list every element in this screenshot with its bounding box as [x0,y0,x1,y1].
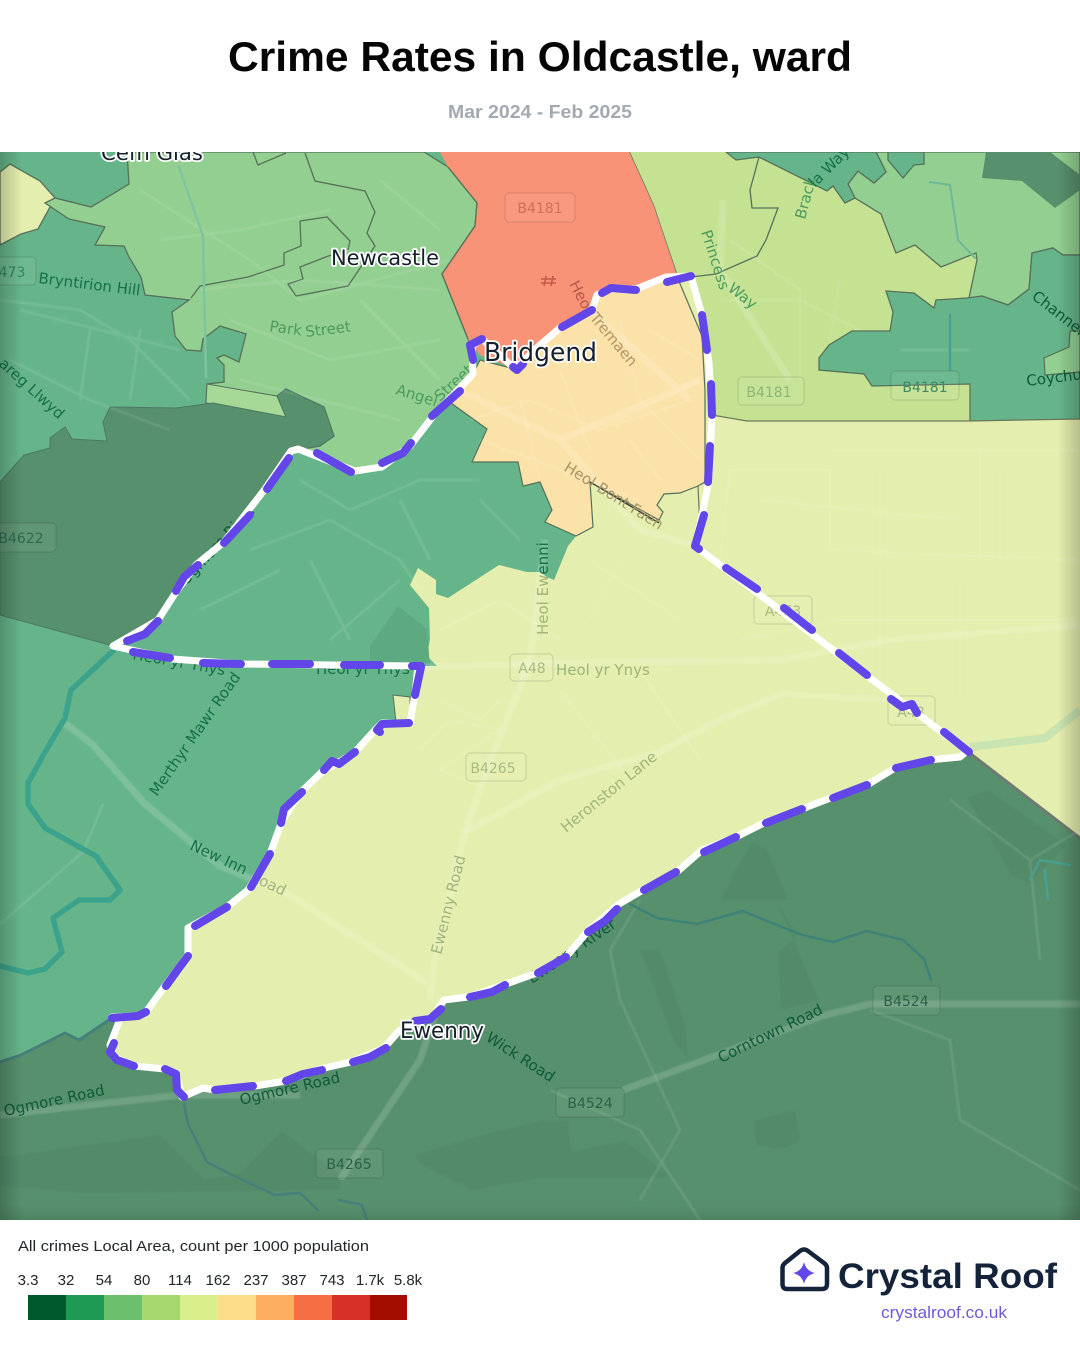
street labels: Way [725,279,761,313]
street labels: Angel [394,381,440,410]
street labels: Merthyr Mawr Road [146,669,244,799]
legend values: 162 [205,1272,231,1289]
street labels: Wick Road [483,1028,558,1086]
legend values: 5.8k [394,1272,423,1289]
darker field patches [0,790,1067,1193]
main roads [0,200,1080,1180]
legend values: 237 [243,1272,269,1289]
street labels: Heol yr Ynys [556,661,650,679]
street labels: Road [247,867,289,900]
region: central north boundaries [191,152,375,298]
region: north east light yellow green [630,152,976,420]
street labels: Princess [697,228,733,292]
region: west ward green [113,403,576,666]
legend values: 114 [168,1272,192,1289]
ward boundary purple dashes [110,276,969,1097]
road numbers: A48 [897,705,925,721]
region: south east yellow [695,415,1080,838]
legend values: 387 [281,1272,307,1289]
subtitle: date range: Mar 2024 - Feb 2025 [448,101,632,122]
street labels: Heol yr Ynys [316,660,410,678]
road: pale A48 east link [970,710,1080,747]
road numbers: B4181 [746,385,792,401]
road numbers: A473 [765,604,801,620]
street labels: Corntown Road [715,1000,825,1067]
minor roads and streets [0,180,1080,1220]
logo wordmark: Crystal Roof [838,1257,1057,1296]
street labels: Ewenny Road [427,853,469,956]
road shields [0,193,959,1178]
region: north east light green [848,152,1080,305]
street labels: Heol yr Ynys [131,645,227,679]
street labels: Ogmore Road [2,1081,106,1120]
legend title: All crimes Local Area, count per 1000 population [18,1238,369,1255]
legend values: 80 [134,1272,150,1289]
region: pale strip [206,384,286,417]
title: Crime Rates in Oldcastle, ward [228,33,852,80]
legend [18,1238,423,1320]
choropleth map: Bridgend [484,338,597,368]
map edge shading [0,152,1080,1220]
ward boundary white line [110,276,967,1097]
street labels: Heronston Lane [557,748,661,836]
region: dark west woodland [0,389,334,646]
legend values [18,1272,423,1289]
street labels: New Inn [187,836,250,878]
region: ward fill [110,276,967,1097]
street labels: Heol [565,277,597,316]
legend values: 32 [58,1272,74,1289]
rivers [0,167,1070,1220]
region: north east mid green [819,248,1080,421]
street labels: Bryntirion Hill [38,269,141,299]
choropleth map: Cefn Glas [101,141,203,165]
website link: crystalroof.co.uk [881,1304,1008,1322]
legend values: 54 [96,1272,112,1289]
choropleth map [0,141,1080,1220]
street labels: Ogmore River [176,500,260,589]
region: top right woodland [982,152,1080,208]
region: top left yellow patch [0,164,55,245]
street labels: Heol Ewenni [534,542,552,635]
street labels: Street [304,318,352,341]
street labels: Park [268,317,303,340]
street labels: Ogmore Road [238,1068,342,1109]
legend values: 743 [319,1272,345,1289]
road numbers: A48 [518,661,546,677]
street labels: Street [431,361,477,405]
region: south woodland dark green [0,751,1080,1220]
street labels [0,143,1080,1120]
road numbers: B4524 [567,1096,613,1112]
legend values: 1.7k [356,1272,385,1289]
region: Brackla green [726,152,924,203]
road numbers: B4524 [883,994,929,1010]
road numbers: B4181 [517,201,563,217]
logo: Crystal Roof [782,1250,1057,1322]
street labels: Heol Bont Faen [561,458,667,534]
road numbers [0,201,948,1173]
icon: house with star [782,1250,827,1289]
place labels: Newcastle [331,246,439,270]
street labels: la Way [805,143,853,191]
street labels: Tremaen [585,308,641,370]
road numbers: B4181 [902,380,948,396]
legend values: 3.3 [18,1272,38,1289]
icon: railway station [541,276,556,286]
street labels: Ewenny River [524,915,620,987]
region: tan ward part [451,277,705,536]
road numbers: B4265 [326,1157,372,1173]
choropleth map: Ewenny [400,1019,484,1044]
street labels: Brack [791,175,820,221]
road numbers: B4265 [470,761,516,777]
legend colour scale [28,1295,407,1320]
region: red town centre [440,152,678,369]
region: north light green [45,152,477,471]
